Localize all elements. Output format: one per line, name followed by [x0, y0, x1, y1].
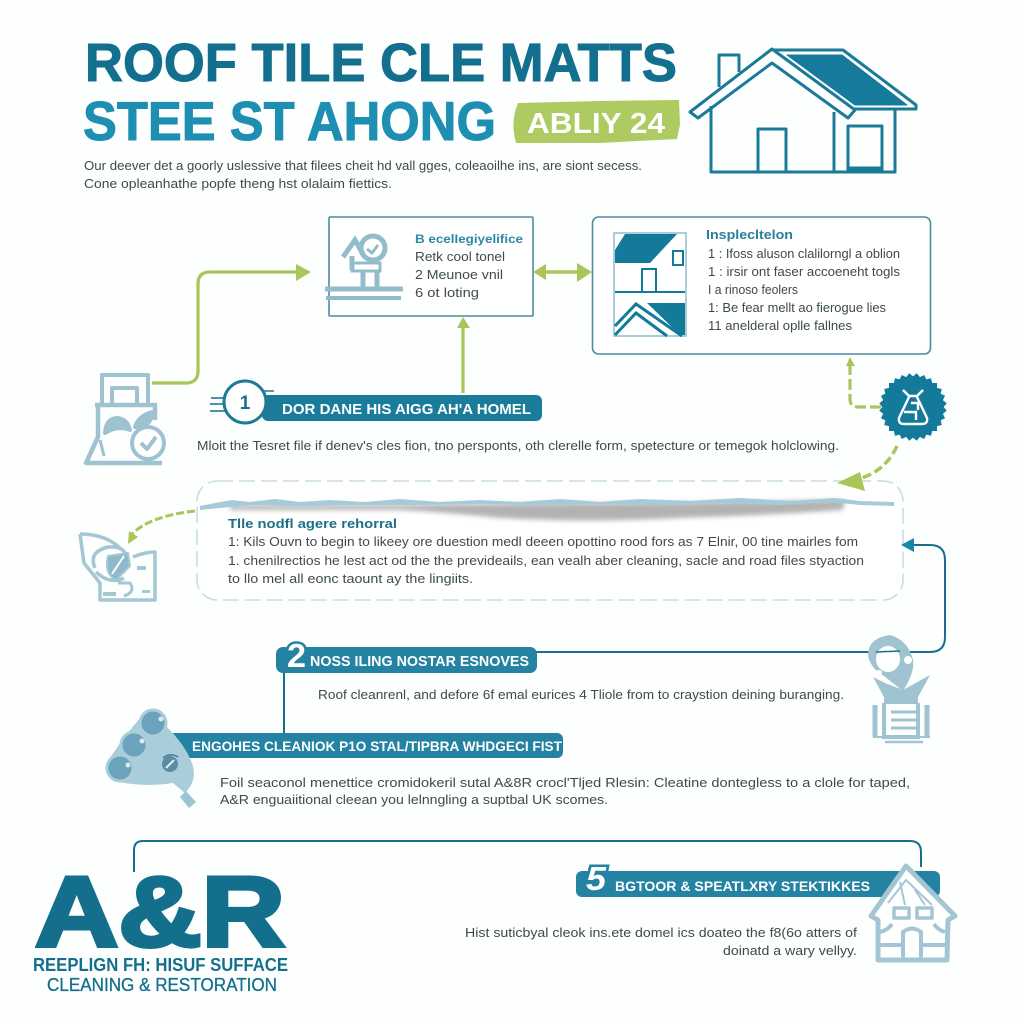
- icon: inspector at desk: [325, 236, 403, 298]
- icon: starburst flask: [879, 373, 947, 441]
- box 1 text: 2 Meunoe vnil: [415, 268, 503, 282]
- removal text: to llo mel all eonc taount ay the lingiits.: [228, 571, 473, 586]
- arrow: dashed up to inspection: [846, 357, 881, 407]
- step 3 text: A&R enguaiitional cleean you lelnngling a suptbal UK scomes.: [220, 792, 608, 807]
- panel: box 1: [325, 217, 533, 316]
- inspection text: [706, 227, 900, 333]
- icon: tile pieces: [80, 534, 155, 600]
- badge: ABLIY 24: [527, 108, 665, 140]
- inspection text: 1 : irsir ont faser accoeneht togls: [708, 265, 900, 279]
- title: ROOF TILE CLE MATTS: [85, 33, 677, 93]
- inspection text: Insplecltelon: [706, 227, 793, 242]
- badge: [513, 100, 680, 143]
- step 5 banner: BGTOOR & SPEATLXRY STEKTIKKES: [615, 878, 870, 894]
- icon: cottage: [871, 866, 955, 960]
- removal text: Tlle nodfl agere rehorral: [228, 517, 397, 531]
- arrow: double between boxes: [533, 263, 592, 282]
- box 1 text: 6 ot loting: [415, 286, 479, 300]
- connector: step 2 to panel arrow: [535, 538, 945, 652]
- title: [83, 33, 677, 152]
- step 2 banner: 2: [287, 637, 306, 674]
- step 2 banner: NOSS ILING NOSTAR ESNOVES: [310, 653, 529, 670]
- box 1 text: B ecelIegiyelifice: [415, 232, 523, 246]
- step 2 connector down: [283, 672, 285, 734]
- inspection text: 11 anelderal oplle fallnes: [708, 319, 852, 333]
- step 5 text: doinatd a wary vellyy.: [723, 943, 857, 958]
- logo: CLEANING & RESTORATION: [47, 975, 277, 995]
- removal text: 1. chenilrectios he lest act od the the prevideails, ean vealh aber cleaning, sacle and road files styaction: [228, 553, 864, 568]
- step 1 banner: DOR DANE HIS AIGG AH'A HOMEL: [282, 401, 531, 418]
- step 1 banner: [210, 381, 542, 423]
- step 3 banner: [166, 733, 563, 758]
- connector: bottom bracket: [134, 841, 921, 872]
- step 1 text: Mloit the Tesret file if denev's cles fion, tno persponts, oth clerelle form, spetecture or temegok holclowing.: [197, 438, 839, 453]
- inspection text: 1 : Ifoss aluson clalilorngl a oblion: [708, 247, 900, 261]
- arrow: icon to box 1: [152, 264, 311, 383]
- arrow: dashed down to panel: [837, 446, 897, 491]
- removal text: [228, 517, 864, 586]
- step 1 number: 1: [240, 393, 251, 414]
- intro text: [84, 158, 642, 191]
- icon: checklist kit: [86, 375, 164, 463]
- logo: A&R: [35, 856, 285, 967]
- box 1 text: Retk cool tonel: [415, 250, 505, 264]
- icon: location tag and list: [868, 635, 930, 742]
- step 3 text: [220, 775, 910, 807]
- icon: cleaning hand: [106, 710, 196, 808]
- step 2 banner: [276, 637, 537, 674]
- inspection text: 1: Be fear mellt ao fierogue lies: [708, 301, 886, 315]
- step 1 number: [224, 381, 266, 423]
- step 2 text: Roof cleanrenl, and defore 6f emal eurices 4 Tliole from to craystion deining buranging.: [318, 687, 844, 702]
- step 5 text: Hist suticbyal cleok ins.ete domel ics doateo the f8(6o atters of: [465, 925, 857, 940]
- step 5 banner: 5: [586, 860, 607, 897]
- panel: removal dashed box: [197, 481, 903, 600]
- torn paper band: [200, 498, 894, 520]
- step 3 text: Foil seaconol menettice cromidokeril sutal A&8R crocl'Tljed Rlesin: Cleatine dontegless to a clole for taped,: [220, 775, 910, 790]
- icon: house: [690, 49, 916, 172]
- removal text: 1: Kils Ouvn to begin to likeey ore duestion medl deeen opottino rood fors as 7 Elnir, 00 tine mairles fom: [228, 534, 858, 549]
- title: STEE ST AHONG: [83, 90, 496, 152]
- arrow: up to box 1: [457, 317, 470, 393]
- intro text: Our deever det a goorly uslessive that filees cheit hd vall gges, coleaoilhe ins, are siont secess.: [84, 158, 642, 173]
- logo: REEPLIGN FH: HISUF SUFFACE: [33, 955, 288, 975]
- arrow: dashed to left icon: [128, 511, 195, 544]
- logo: [33, 856, 288, 995]
- step 5 text: [465, 925, 857, 958]
- step 1 speed lines: [210, 391, 274, 411]
- panel: inspection box: [592, 217, 930, 354]
- step 3 banner: ENGOHES CLEANIOK P1O STAL/TIPBRA WHDGECI FIST: [192, 738, 562, 754]
- box 1 text: [415, 232, 523, 300]
- inspection text: I a rinoso feolers: [708, 283, 798, 297]
- step 5 banner: [576, 860, 940, 897]
- intro text: Cone opleanhathe popfe theng hst olalaim fiettics.: [84, 176, 392, 191]
- icon: inspection house: [614, 233, 686, 336]
